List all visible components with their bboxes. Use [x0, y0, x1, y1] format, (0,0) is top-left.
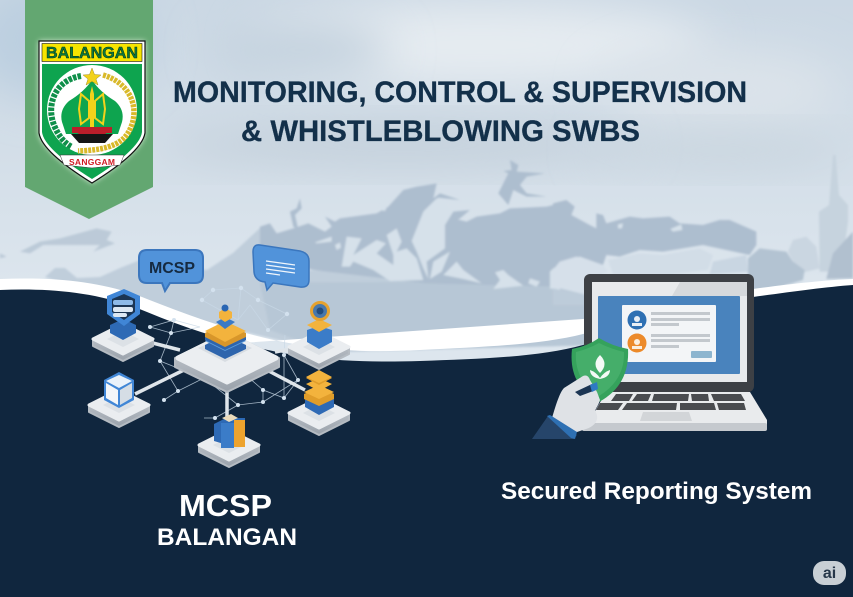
lower haze land — [45, 228, 853, 352]
badge: ai — [813, 561, 846, 585]
label: MCSP BALANGAN — [157, 488, 297, 551]
laptop screen — [592, 282, 747, 382]
far-left island — [0, 228, 115, 258]
emblem green wreath — [51, 76, 81, 147]
emblem motto ribbon: SANGGAM — [69, 157, 115, 167]
dome and tower — [788, 237, 820, 273]
gloved hand — [532, 376, 600, 439]
node: white cube — [89, 372, 149, 427]
report card — [622, 305, 716, 362]
node: ring tower — [289, 302, 349, 369]
emblem star — [83, 68, 101, 85]
speech bubble: MCSP: MCSP — [149, 260, 195, 277]
network diagram — [89, 245, 349, 467]
banner with emblem — [25, 0, 153, 219]
banner ribbon — [25, 0, 153, 219]
thin northern peninsula — [498, 160, 547, 205]
label: MCSP BALANGAN: MCSP — [179, 488, 272, 523]
badge: ai: ai — [823, 565, 836, 582]
laptop with security shield — [532, 274, 767, 439]
wave: white band — [0, 278, 853, 360]
central hub — [175, 304, 279, 392]
emblem ship — [72, 127, 112, 141]
node: orange stack — [289, 370, 349, 435]
emblem gold wreath — [78, 75, 134, 151]
mesh lines — [150, 288, 298, 418]
label: MCSP BALANGAN: BALANGAN — [157, 524, 297, 551]
emblem twin mandau — [79, 94, 105, 124]
map silhouette — [0, 155, 853, 352]
wave: navy lower panel — [0, 285, 853, 597]
laptop lid — [584, 274, 754, 392]
eastern land mass and skyline — [553, 155, 853, 305]
title: & WHISTLEBLOWING SWBS — [241, 115, 640, 148]
title — [173, 76, 747, 148]
label: Secured Reporting System: Secured Reporting System — [501, 478, 812, 505]
emblem header: BALANGAN — [46, 45, 138, 62]
connector arms — [135, 341, 305, 425]
title: MONITORING, CONTROL & SUPERVISION — [173, 76, 747, 109]
emblem shield — [39, 41, 145, 183]
node: folders — [199, 414, 259, 467]
emblem motto ribbon — [60, 155, 124, 168]
western and central land mass — [260, 160, 560, 290]
speech bubble: MCSP — [139, 250, 203, 291]
security shield — [572, 338, 628, 402]
laptop base — [582, 392, 767, 431]
speech bubble: message — [253, 245, 309, 290]
light holes in the land — [315, 198, 560, 290]
node: hexagon server — [93, 289, 153, 361]
